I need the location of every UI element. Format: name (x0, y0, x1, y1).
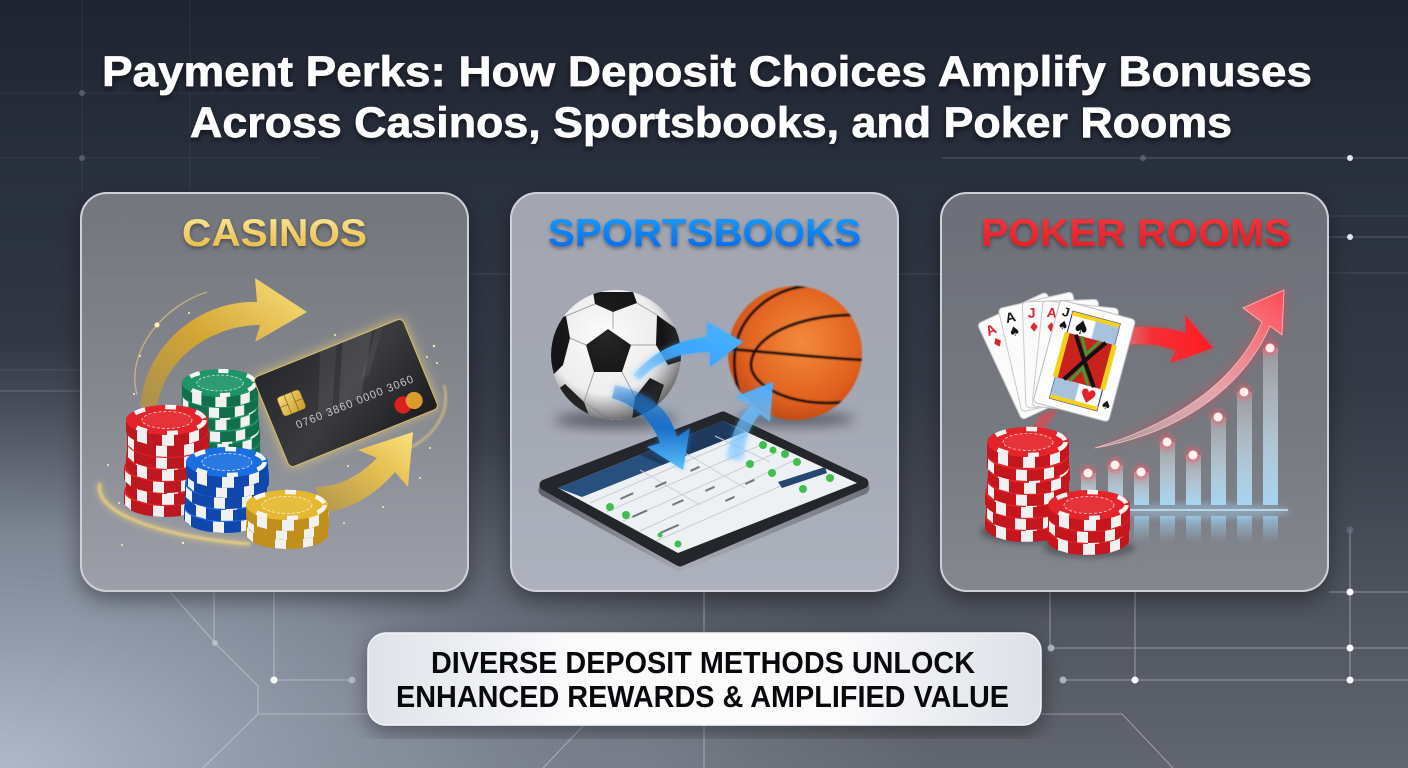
callout text (396, 645, 1009, 714)
chips: gold stack (246, 490, 329, 549)
card: ace of diamonds: A (983, 320, 999, 339)
card number: 0760 3860 0000 3060 (294, 374, 415, 432)
card: jack of spades: ♠ (1070, 315, 1092, 341)
callout text: ENHANCED REWARDS & AMPLIFIED VALUE (396, 679, 1009, 714)
credit card (253, 318, 439, 468)
card: ace of diamonds: ♦ (990, 334, 1007, 353)
card: jack of spades (1033, 300, 1136, 422)
title: Payment Perks: How Deposit Choices Amplify Bonuses (102, 48, 1312, 96)
chips: green stack (182, 369, 260, 466)
navy button (778, 467, 827, 488)
card: jack of spades: ♠ (1099, 397, 1113, 413)
title: Across Casinos, Sportsbooks, and Poker Rooms (190, 99, 1232, 147)
card: jack of diamonds: ♦ (1028, 320, 1040, 336)
tablet (545, 417, 863, 565)
panel: sportsbooks (511, 193, 898, 591)
card: jack of spades: ♥ (1077, 384, 1099, 410)
soccer ball (540, 290, 684, 420)
card: ace of diamonds second: A (1046, 304, 1058, 321)
card: ace of spades: A (1004, 308, 1017, 326)
card: jack of diamonds (1022, 299, 1102, 408)
basketball (728, 286, 864, 420)
chips: large red stack (980, 427, 1076, 544)
playing cards (977, 292, 1136, 422)
heading: poker rooms: POKER ROOMS (981, 212, 1291, 255)
title (102, 48, 1312, 147)
card chip (276, 389, 306, 417)
arrow: tablet to basketball (727, 382, 773, 460)
card: jack of spades: ♠ (1056, 317, 1070, 333)
chips: blue stack (184, 447, 269, 533)
heading: casinos: CASINOS (182, 212, 367, 255)
ball shadows (554, 412, 855, 428)
chips: small red stack (1043, 490, 1135, 558)
card: ace of diamonds second (1032, 301, 1119, 414)
card: jack of diamonds: J (1027, 305, 1036, 321)
card: jack of spades: J (1061, 304, 1071, 320)
callout banner (368, 633, 1041, 725)
card: ace of spades: ♠ (1007, 323, 1022, 341)
card: ace of spades (998, 292, 1096, 412)
card: ace of diamonds (977, 292, 1091, 420)
bar chart (1081, 341, 1290, 542)
card: ace of diamonds second: ♦ (1044, 320, 1058, 336)
heading: sportsbooks: SPORTSBOOKS (548, 212, 861, 255)
arrow: soccer to basketball (633, 322, 743, 380)
card logo (392, 389, 425, 416)
panel: casinos (81, 193, 468, 591)
sparkles (107, 312, 438, 546)
arrow: rising trend (1095, 290, 1284, 448)
arrow: soccer to tablet (612, 385, 690, 470)
green status dots (606, 441, 834, 548)
screen header (558, 421, 745, 497)
arrow: gold lower (315, 432, 413, 512)
tablet screen (558, 421, 857, 553)
chips: red stack (124, 405, 209, 517)
arrow: gold upper (140, 278, 307, 407)
screen rows (590, 436, 795, 541)
glow swooshes (99, 292, 446, 544)
callout text: DIVERSE DEPOSIT METHODS UNLOCK (431, 645, 976, 680)
beam: chips to cards (1025, 408, 1058, 438)
arrow: cards to growth (1118, 315, 1213, 363)
panel: poker rooms (941, 193, 1328, 591)
